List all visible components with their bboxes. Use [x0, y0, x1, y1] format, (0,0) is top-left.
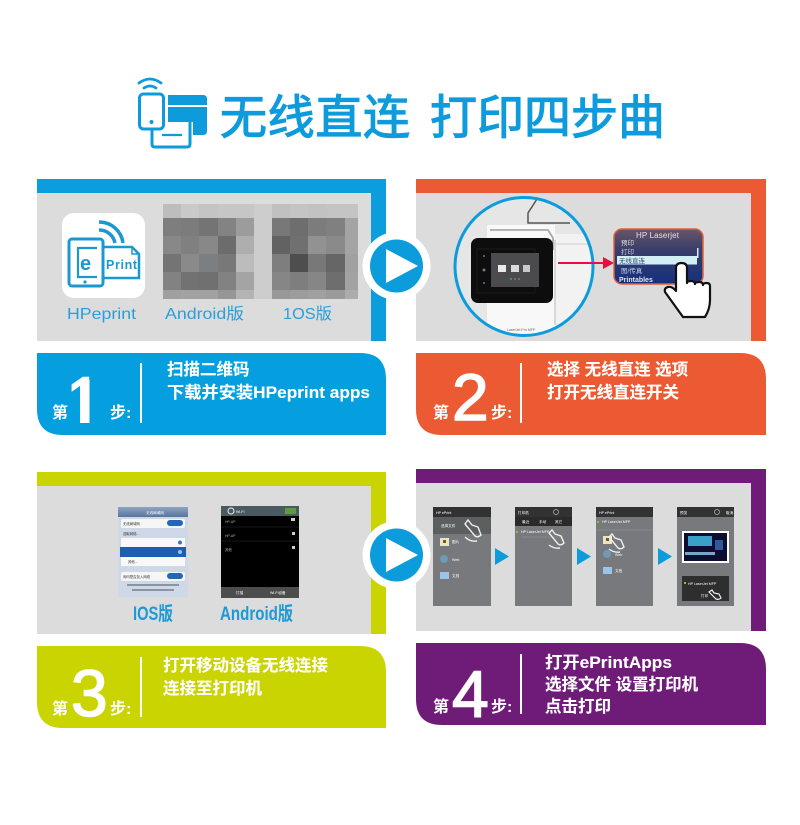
Android Wi-Fi settings screen: Wi-Fi设备 [270, 590, 286, 595]
app screen 3 [596, 507, 653, 606]
step 2 number: 步: [491, 403, 512, 422]
icon: HP ePrint app: Print [106, 258, 138, 272]
app and QR labels: 1OS版 [283, 305, 332, 323]
app screen 4: 预览 [680, 510, 688, 515]
HP menu screen [614, 229, 703, 284]
panel: step 1 [37, 179, 386, 437]
printer close-up circle [450, 195, 600, 340]
OS version labels: Android版 [220, 603, 293, 625]
app screen 2: 其它 [555, 519, 563, 524]
step 4 divider [520, 654, 522, 714]
iOS Wi-Fi settings screen: 其他... [128, 559, 138, 564]
app screen 1 [433, 507, 491, 606]
app screen 3: HP LaserJet MFP [602, 520, 631, 524]
step 3 bar [37, 646, 386, 728]
arrow: play button, step 1 to 2 [362, 232, 430, 300]
app screen 4 [677, 507, 734, 606]
app screen 2 [515, 507, 572, 606]
app screen 2: 最近 [522, 519, 530, 524]
HP menu screen: 无线直连 [619, 256, 646, 265]
panel: step 4 [416, 469, 766, 731]
app screen 1: HP ePrint [436, 511, 451, 515]
step 4 number: 步: [491, 697, 512, 716]
app screen 1: Web [452, 558, 459, 562]
QR code mosaic: iOS [272, 204, 358, 299]
app screen 3: 文档 [615, 568, 623, 573]
step 2 instructions [547, 359, 689, 402]
arrow: red [558, 257, 614, 269]
step 1 number [52, 376, 130, 423]
step 3 divider [140, 657, 142, 717]
step 4 instructions: 点击打印 [545, 696, 611, 716]
step 4 instructions: 打开ePrintApps [545, 652, 672, 672]
app screen 4: 打印 [701, 593, 709, 598]
step 2 instructions: 选择 无线直连 选项 [547, 359, 689, 379]
step 3 number [52, 656, 131, 730]
step 1 image area [37, 193, 371, 341]
Android Wi-Fi settings screen: HP-AP [225, 520, 236, 524]
app screen 4: HP LaserJet MFP [688, 582, 717, 586]
step 3 number: 步: [110, 699, 131, 718]
iOS Wi-Fi settings screen: 询问是否加入网络 [123, 574, 151, 579]
step 1 number: 第 [52, 403, 68, 422]
app screen 3: HP ePrint [599, 511, 614, 515]
step 2 number: 2 [452, 360, 489, 434]
iOS Wi-Fi settings screen [118, 507, 188, 597]
iOS Wi-Fi settings screen: 无线局域网 [146, 510, 164, 515]
step 2 number: 第 [433, 403, 449, 422]
step 4 number: 第 [433, 697, 449, 716]
HP menu screen: Printables [619, 277, 653, 284]
step 4 number [433, 657, 512, 731]
Android Wi-Fi settings screen: 打描 [236, 590, 244, 595]
iOS Wi-Fi settings screen: 选取网络... [123, 531, 139, 536]
Android Wi-Fi settings screen [221, 506, 299, 598]
HP menu screen: 图/传真 [621, 266, 643, 275]
step 2 divider [520, 363, 522, 423]
step 2 frame [416, 179, 766, 341]
app screen 1: 图片 [452, 539, 460, 544]
step 4 number: 4 [452, 657, 489, 731]
app and QR labels: Android版 [165, 305, 244, 323]
step 3 image area [37, 486, 371, 634]
step 1 instructions: 扫描二维码 [167, 360, 250, 379]
iOS Wi-Fi settings screen: 无线局域网 [123, 521, 141, 526]
app screen 1: 文档 [452, 573, 460, 578]
step 4 bar [416, 643, 766, 725]
Android Wi-Fi settings screen: 其他 [225, 547, 232, 552]
icon: HP ePrint app [62, 213, 145, 298]
step 3 number: 第 [52, 699, 68, 718]
OS version labels [133, 603, 293, 625]
step 3 frame [37, 472, 386, 634]
app screen 2: 手动 [539, 519, 547, 524]
step 2 bar [416, 353, 766, 435]
app screen 2: 打印机 [518, 510, 529, 515]
step 1 frame [37, 179, 386, 341]
step 1 bar [37, 353, 386, 435]
step 4 image area [416, 483, 751, 631]
step 4 frame [416, 469, 766, 631]
Android Wi-Fi settings screen: HP-AP [225, 534, 236, 538]
step 1 divider [140, 363, 142, 423]
step 3 number: 3 [71, 656, 108, 730]
printer close-up circle: LaserJet Pro MFP [507, 328, 536, 332]
step 2 instructions: 打开无线直连开关 [547, 382, 680, 402]
title text: 无线直连 [220, 91, 410, 144]
app screen 2: HP LaserJet MFP [521, 530, 550, 534]
QR code mosaic: Android [163, 204, 272, 299]
step 4 instructions: 选择文件 设置打印机 [545, 674, 699, 694]
HP menu screen: HP Laserjet [636, 231, 680, 240]
arrow: play button, step 3 to 4 [362, 521, 430, 589]
app and QR labels: HPeprint [67, 306, 137, 323]
title header: 打印四步曲 [430, 91, 665, 144]
step 1 number: 1 [66, 363, 103, 437]
title header [139, 79, 665, 147]
app and QR labels [67, 305, 332, 323]
HP menu screen: 打印 [621, 247, 634, 256]
step 1 instructions [167, 360, 370, 402]
step 2 image area [416, 193, 751, 341]
step 4 instructions [545, 652, 699, 716]
step 1 number: 步: [110, 403, 131, 422]
step 3 instructions [163, 655, 328, 698]
icon: pointing hand [665, 263, 710, 317]
panel: step 2 [416, 179, 766, 435]
icon: wireless phone and printer [139, 79, 207, 147]
arrow: 2 to 3 [577, 548, 591, 565]
icon: HP ePrint app: e [80, 253, 91, 275]
app screen 1: 选择文件 [441, 523, 456, 528]
arrow: 3 to 4 [658, 548, 672, 565]
step 2 number [433, 360, 512, 434]
app screen 3: Web [615, 553, 622, 557]
step 3 instructions: 连接至打印机 [163, 678, 262, 698]
step 1 instructions: 下载并安装HPeprint apps [167, 382, 370, 402]
OS version labels: IOS版 [133, 603, 173, 625]
HP menu screen: 预印 [621, 238, 634, 247]
arrow: 1 to 2 [495, 548, 509, 565]
Android Wi-Fi settings screen: Wi-Fi [236, 510, 245, 514]
app screen 4: 取消 [726, 510, 734, 515]
step 3 instructions: 打开移动设备无线连接 [163, 655, 328, 675]
panel: step 3 [37, 472, 386, 730]
